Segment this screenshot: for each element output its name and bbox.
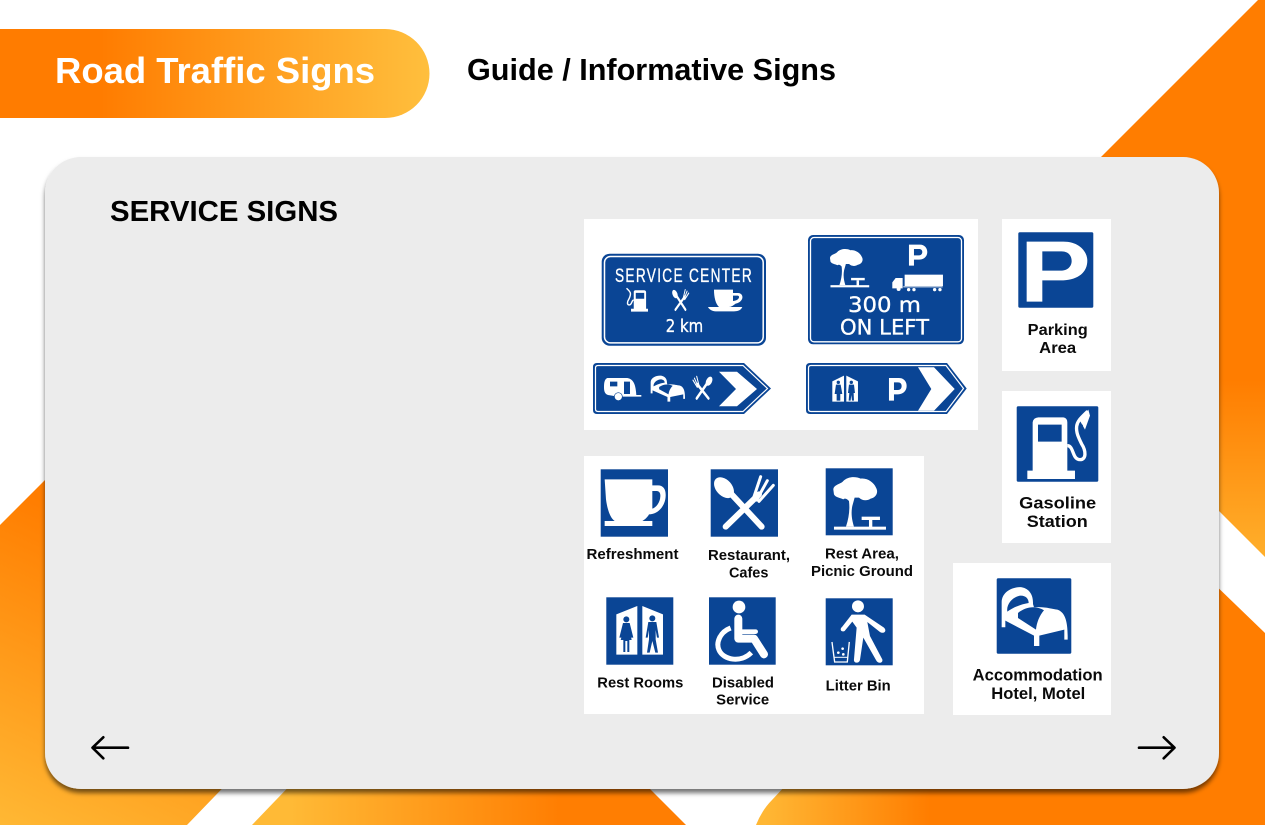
icon: refreshment cup: [586, 469, 679, 563]
background: top right orange shape: [1058, 0, 1265, 557]
icon: rest rooms: [597, 597, 683, 692]
arrow: previous: [92, 737, 128, 758]
icon: disabled service: [709, 597, 776, 709]
arrow: next: [1139, 737, 1174, 758]
label: rest rooms: Rest Rooms: [597, 676, 683, 692]
panel: gasoline station: [1002, 391, 1111, 543]
subtitle: Guide / Informative Signs: [467, 52, 836, 87]
sign: 300 m on left: ON LEFT: [840, 316, 930, 341]
section heading: SERVICE SIGNS: [110, 196, 338, 228]
background: bottom left orange shape: [0, 425, 269, 825]
label: litter bin: Litter Bin: [826, 678, 891, 694]
background: lower right orange shape: [1150, 522, 1265, 825]
label: restaurant: Restaurant,: [708, 548, 790, 564]
icon: disabled service: Service: [716, 693, 769, 709]
label: gasoline station: Gasoline: [1019, 494, 1096, 512]
icon: rest area tree: [811, 468, 913, 580]
panel: accommodation: [953, 563, 1111, 715]
panel: directional service signs: [584, 219, 978, 430]
icon: parking: [1018, 232, 1093, 308]
panel: parking area: [1002, 219, 1111, 371]
panel: gasoline station: Station: [1027, 513, 1088, 531]
icon: restaurant cutlery: Cafes: [729, 566, 768, 582]
icon: fuel pump: [1017, 406, 1098, 482]
label: parking area: Parking: [1028, 322, 1088, 339]
sign: caravan, bed, food arrow: [593, 363, 771, 414]
header banner: [0, 29, 430, 118]
sign: service center 2 km: 2 km: [666, 316, 703, 337]
panel: accommodation: Hotel, Motel: [991, 685, 1085, 703]
label: disabled service: Disabled: [712, 676, 774, 692]
sign: 300 m on left: [808, 235, 964, 344]
icon: litter bin: [826, 598, 893, 694]
label: rest area: Rest Area,: [825, 547, 899, 563]
background: bottom centre gradient shape: [252, 775, 686, 825]
title: Road Traffic Signs: [55, 50, 375, 91]
sign: rest rooms, parking arrow: [806, 363, 967, 414]
sign: 300 m on left: 300 m: [848, 293, 921, 318]
panel: parking area: Area: [1039, 340, 1076, 357]
sign: service center 2 km: SERVICE CENTER: [615, 266, 753, 287]
label: refreshment: Refreshment: [586, 547, 679, 563]
icon: bed: [997, 578, 1071, 654]
panel: service symbol grid: [584, 456, 924, 714]
sign: service center 2 km: [602, 254, 766, 346]
background: bottom right gradient shape: [756, 770, 1265, 825]
icon: rest area tree: Picnic Ground: [811, 564, 913, 580]
label: accommodation hotel motel: Accommodation: [973, 667, 1103, 685]
icon: restaurant cutlery: [708, 469, 790, 582]
